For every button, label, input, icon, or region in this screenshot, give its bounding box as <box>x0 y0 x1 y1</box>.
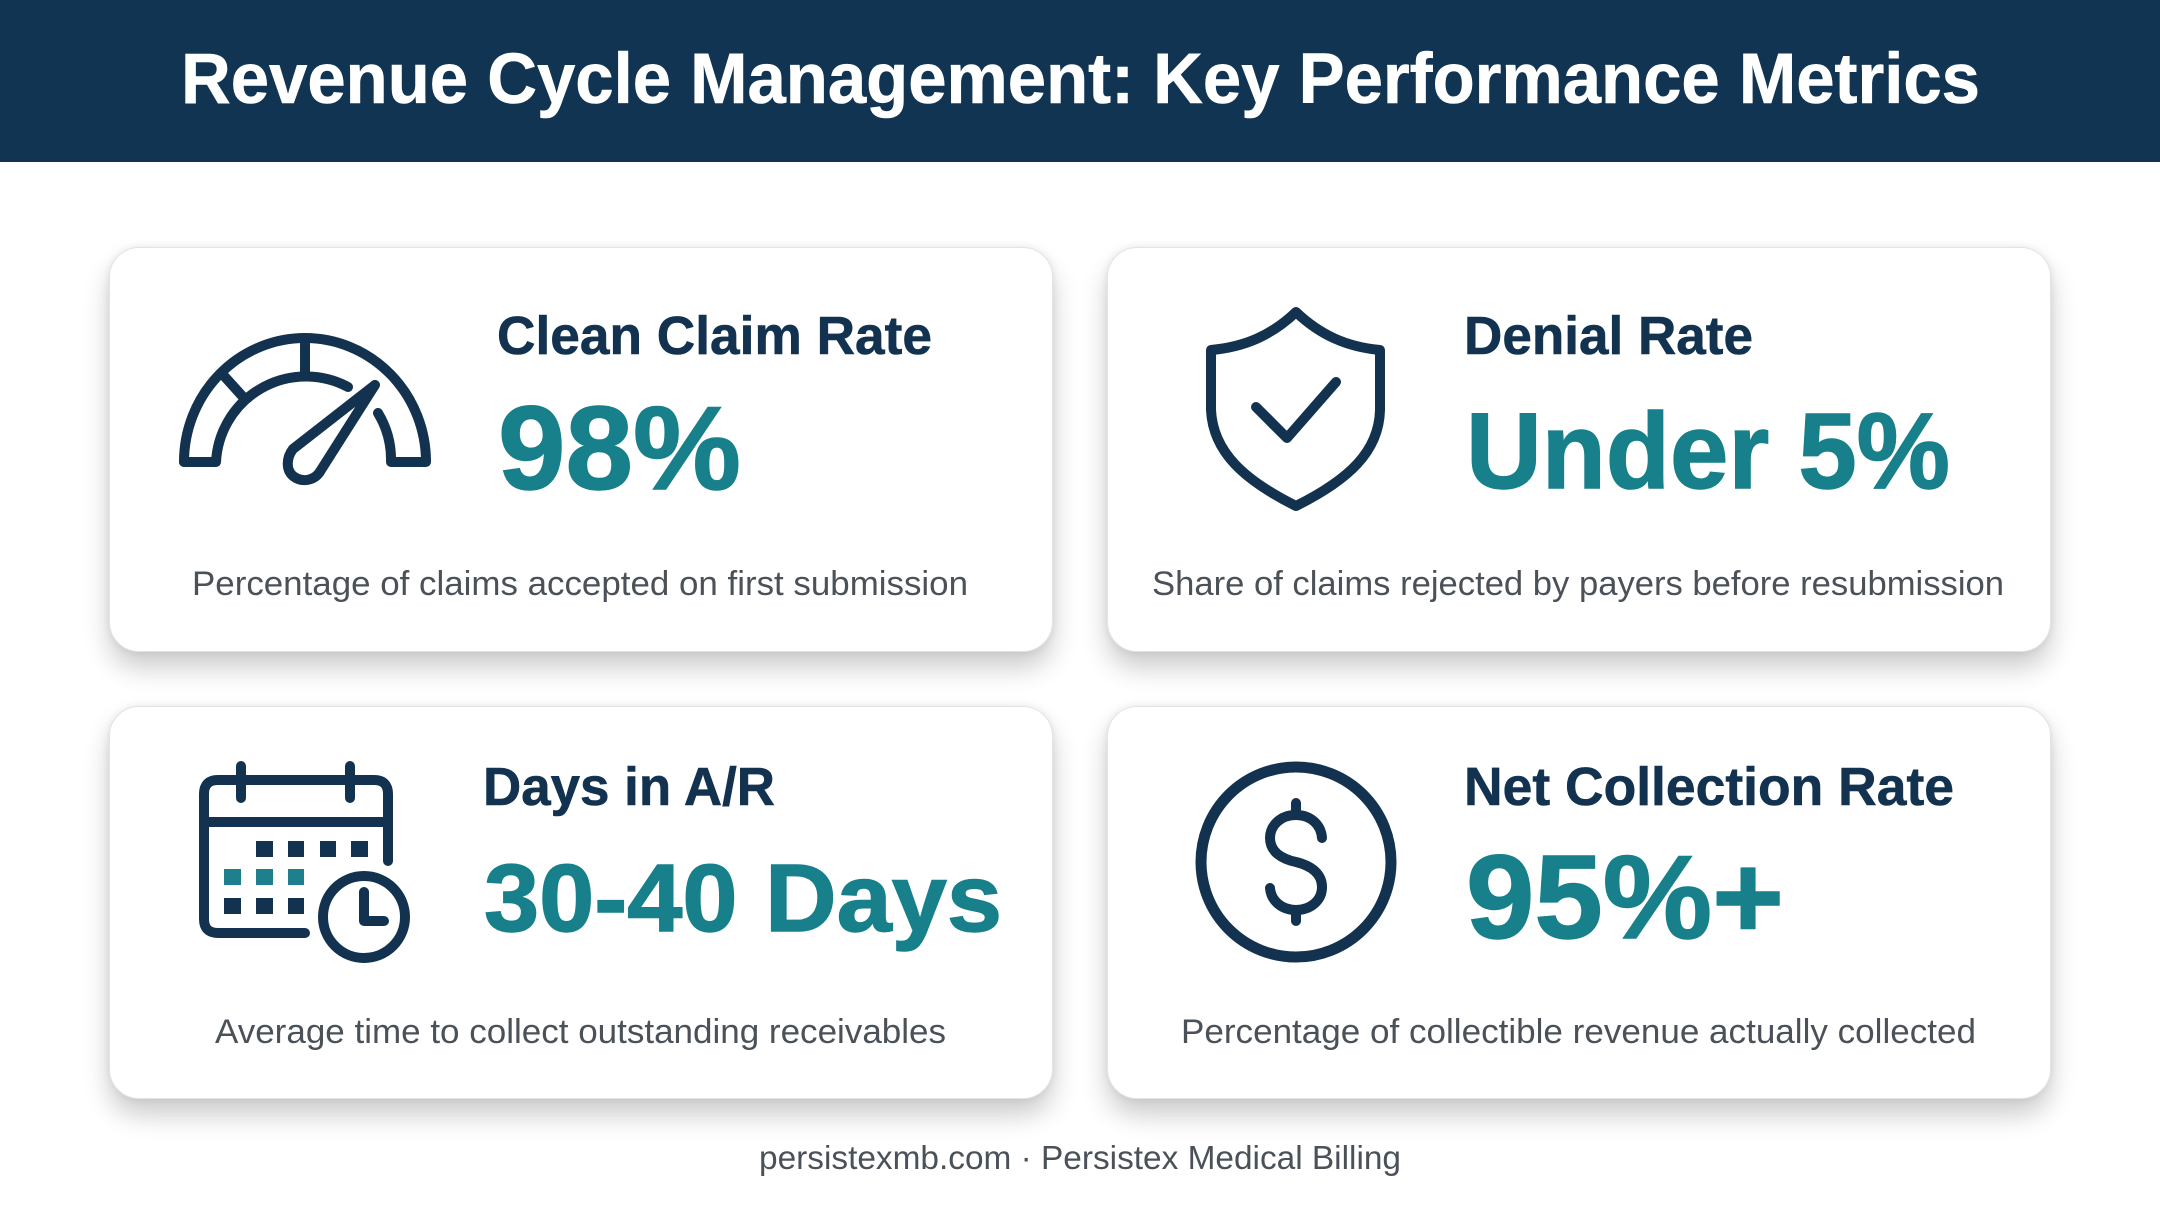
footer: persistexmb.com · Persistex Medical Billing <box>759 1139 1401 1176</box>
description: Percentage of claims accepted on first submission <box>192 565 968 603</box>
heading: clean claim rate: Clean Claim Rate <box>497 306 932 366</box>
panel: days in A/R <box>204 757 1002 1051</box>
panel: clean claim rate <box>184 306 968 603</box>
panel: days in A/R card background <box>109 706 1053 1099</box>
icon: gauge <box>184 338 426 480</box>
value: under 5%: Under 5% <box>1466 390 1950 511</box>
description: Percentage of collectible revenue actually collected <box>1181 1013 1976 1051</box>
panel: net collection rate <box>1181 757 1976 1051</box>
icon: calendar with clock <box>204 766 405 958</box>
value: 95%+: 95%+ <box>1466 831 1784 964</box>
heading: net collection rate: Net Collection Rate <box>1464 757 1954 817</box>
header banner <box>0 0 2160 162</box>
heading: days in A/R: Days in A/R <box>483 757 775 817</box>
description: Average time to collect outstanding receivables <box>215 1013 946 1051</box>
panel: net collection rate card background <box>1107 706 2051 1099</box>
panel: denial rate <box>1152 306 2004 603</box>
description: Share of claims rejected by payers before resubmission <box>1152 565 2004 603</box>
title: Revenue Cycle Management: Key Performance Metrics <box>181 40 1980 119</box>
panel: denial rate card background <box>1107 247 2051 652</box>
value: 98%: 98% <box>498 382 741 515</box>
value: 30-40 days: 30-40 Days <box>484 845 1002 952</box>
panel: clean claim rate card background <box>109 247 1053 652</box>
icon: shield with check <box>1211 312 1380 506</box>
heading: denial rate: Denial Rate <box>1464 306 1753 366</box>
icon: dollar coin <box>1201 767 1391 957</box>
